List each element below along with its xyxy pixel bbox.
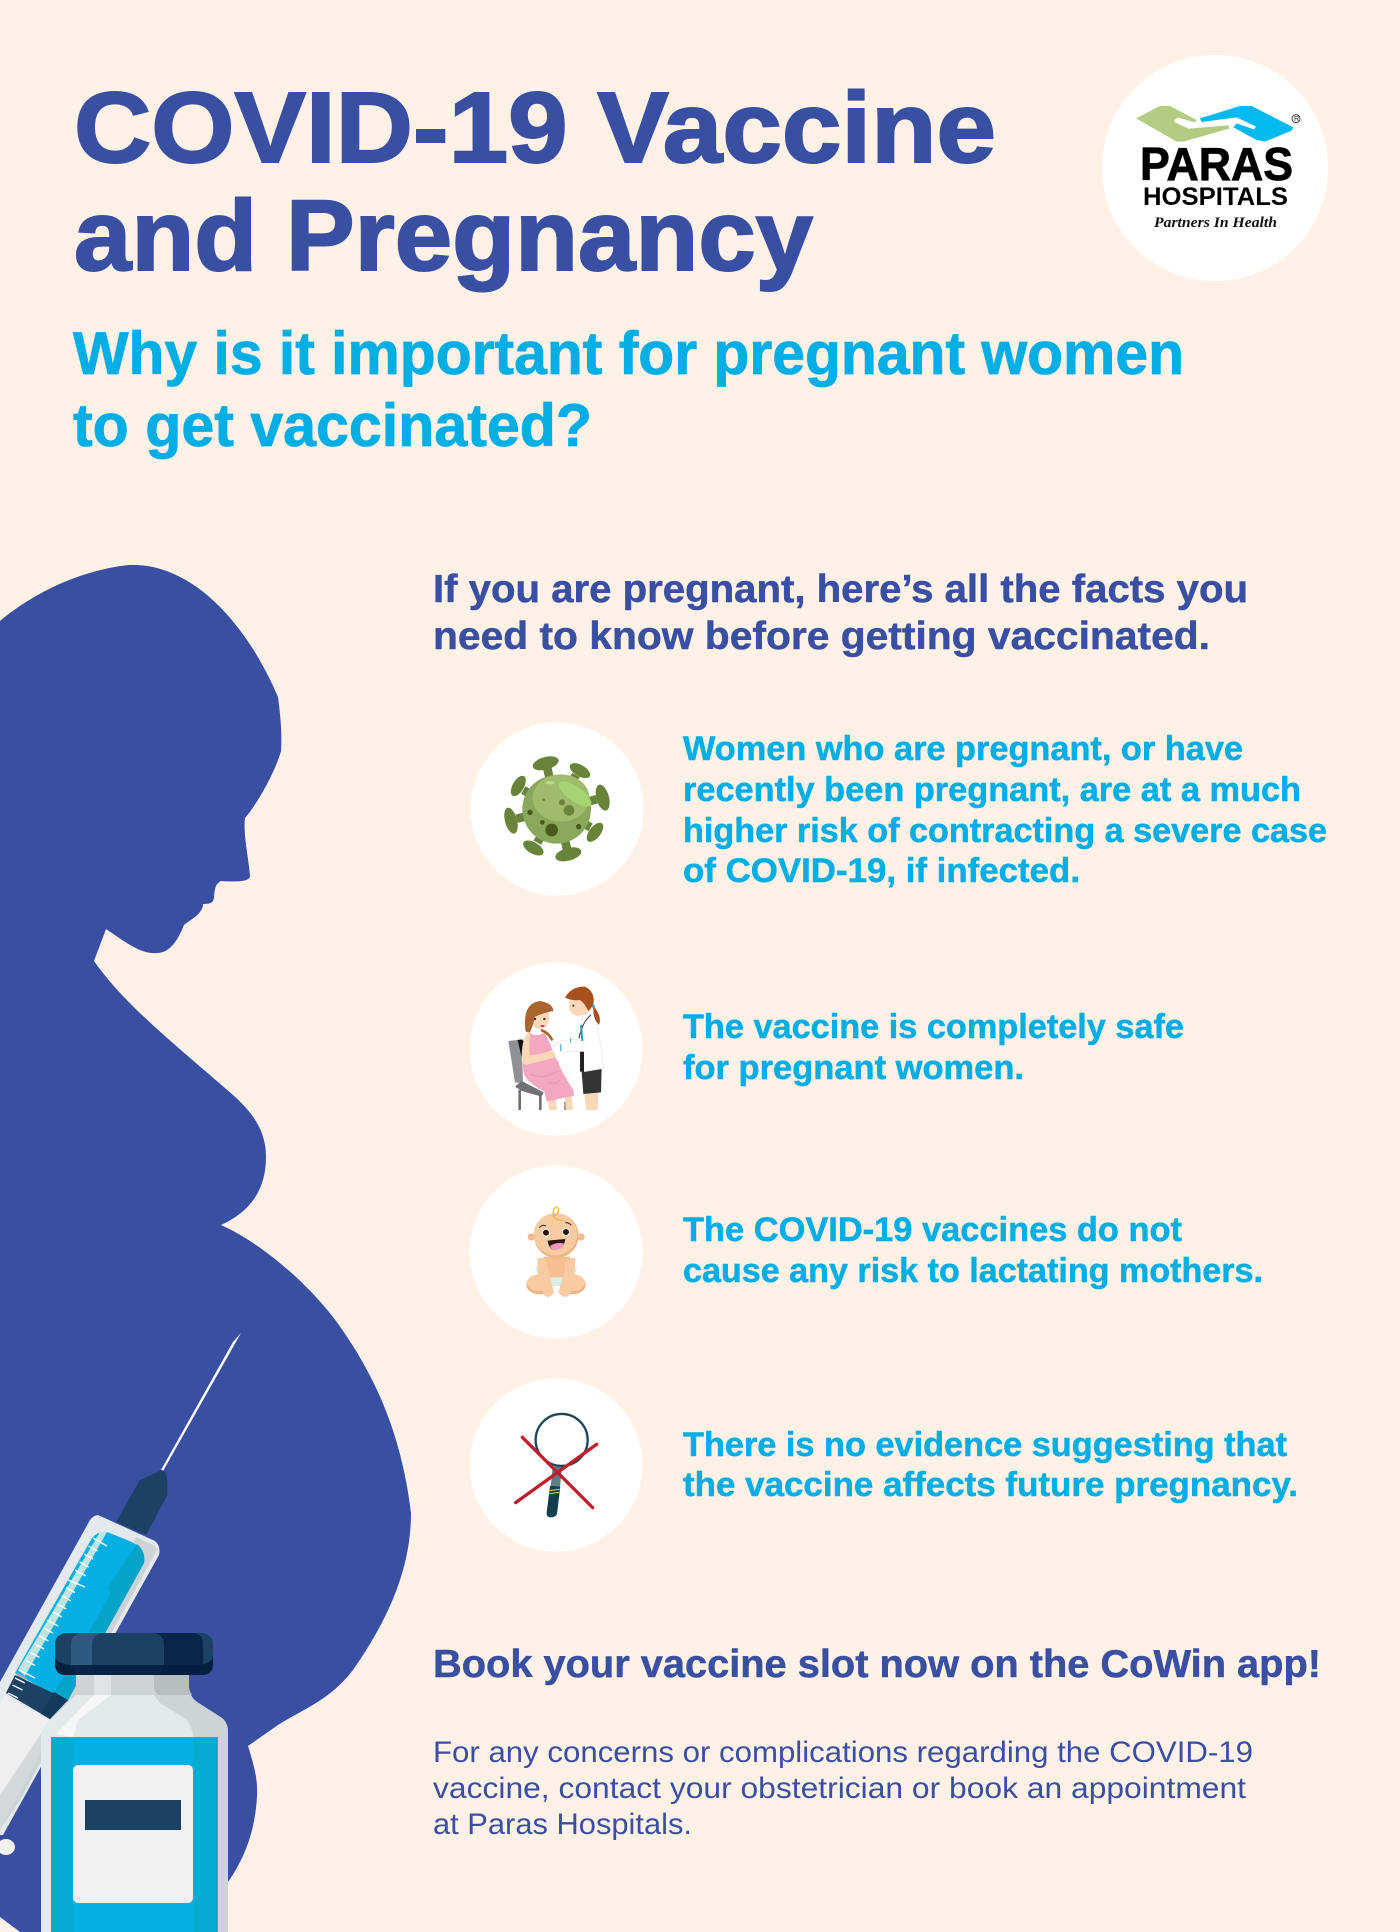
logo circle xyxy=(1102,55,1328,281)
logo hands xyxy=(1136,106,1300,142)
intro heading: If you are pregnant, here’s all the facts you xyxy=(433,568,1248,611)
fact 1 text xyxy=(683,730,1327,890)
logo: Paras Hospitals: R xyxy=(1294,116,1299,123)
icon: baby xyxy=(470,1166,642,1338)
fact 1 text: higher risk of contracting a severe case xyxy=(683,812,1327,850)
logo wordmark: PARAS xyxy=(1140,138,1293,190)
fact 2 xyxy=(470,962,1184,1136)
contact note: at Paras Hospitals. xyxy=(433,1808,692,1841)
illustration: vaccine vial xyxy=(41,1633,228,1932)
fact 3 text: The COVID-19 vaccines do not xyxy=(683,1211,1182,1249)
icon: virus xyxy=(470,722,644,896)
fact 2 text: for pregnant women. xyxy=(683,1049,1024,1087)
contact note xyxy=(433,1736,1253,1841)
fact 2 text: The vaccine is completely safe xyxy=(683,1008,1184,1046)
call to action: Book your vaccine slot now on the CoWin app! xyxy=(433,1643,1321,1686)
icon: crossed magnifying glass xyxy=(470,1378,642,1552)
icon: doctor and pregnant patient xyxy=(470,962,642,1136)
intro heading xyxy=(433,568,1248,658)
fact 1 xyxy=(470,722,1327,896)
title: COVID-19 Vaccine xyxy=(74,72,996,184)
vial label xyxy=(73,1765,193,1903)
syringe plunger end xyxy=(0,1839,15,1855)
fact 2 text xyxy=(683,1008,1184,1087)
vial label background xyxy=(51,1737,218,1932)
subtitle: Why is it important for pregnant women xyxy=(73,320,1184,387)
logo: Paras Hospitals: HOSPITALS xyxy=(1143,183,1288,211)
title xyxy=(74,72,996,292)
vial label bar xyxy=(85,1800,181,1830)
title: and Pregnancy xyxy=(74,180,813,292)
fact 4 text xyxy=(683,1426,1298,1504)
fact 4 xyxy=(470,1378,1298,1552)
logo: Paras Hospitals xyxy=(1102,55,1328,281)
fact 3 text: cause any risk to lactating mothers. xyxy=(683,1252,1263,1290)
syringe barrel xyxy=(0,1515,160,1835)
logo: Paras Hospitals: Partners In Health xyxy=(1154,215,1277,231)
syringe plunger band xyxy=(6,1675,68,1719)
vial cap xyxy=(55,1633,213,1675)
fact 3 xyxy=(470,1166,1263,1338)
fact 1 text: recently been pregnant, are at a much xyxy=(683,771,1301,809)
syringe hub xyxy=(116,1470,167,1535)
silhouette: pregnant woman xyxy=(0,565,411,1932)
fact 4 text: the vaccine affects future pregnancy. xyxy=(683,1466,1298,1504)
vial glass xyxy=(41,1675,228,1932)
fact 1 text: of COVID-19, if infected. xyxy=(683,852,1080,890)
needle xyxy=(161,1333,241,1471)
fact 4 text: There is no evidence suggesting that xyxy=(683,1426,1287,1464)
subtitle xyxy=(73,320,1184,459)
subtitle: to get vaccinated? xyxy=(73,392,592,459)
illustration: syringe xyxy=(0,1333,241,1855)
fact 1 text: Women who are pregnant, or have xyxy=(683,730,1243,768)
fact 3 text xyxy=(683,1211,1263,1290)
contact note: For any concerns or complications regarding the COVID-19 xyxy=(433,1736,1253,1769)
contact note: vaccine, contact your obstetrician or book an appointment xyxy=(433,1772,1247,1805)
syringe fluid xyxy=(15,1532,144,1702)
intro heading: need to know before getting vaccinated. xyxy=(433,615,1210,658)
syringe tick marks xyxy=(8,1538,107,1698)
